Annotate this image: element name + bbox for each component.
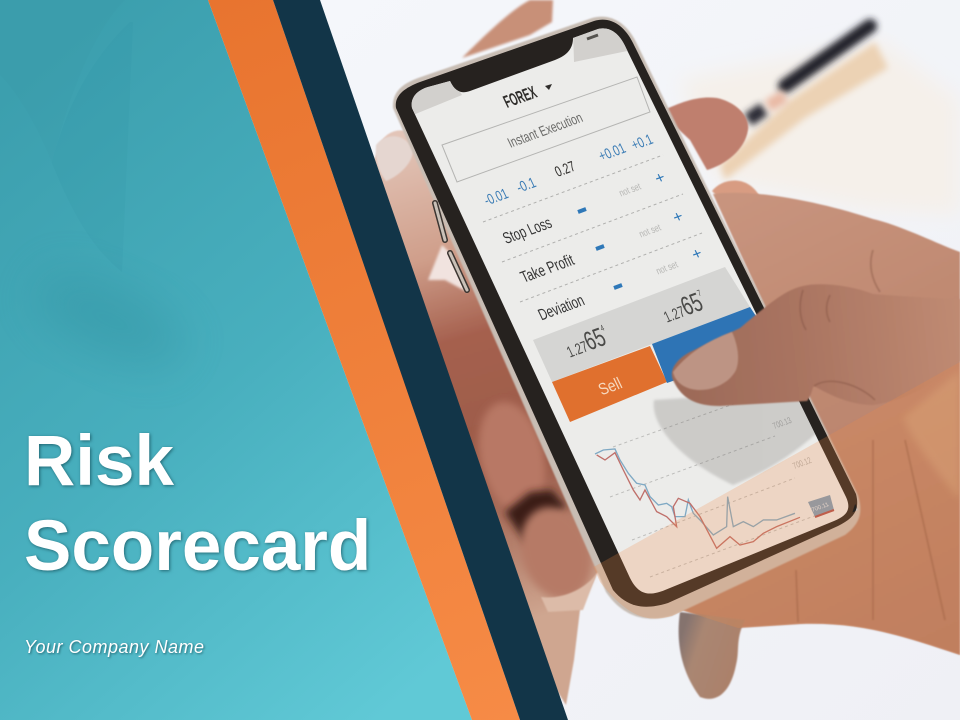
app: price panel: 1.2765 xyxy=(564,322,610,361)
orange diagonal stripe xyxy=(208,0,520,720)
app: take profit row: not set xyxy=(638,223,663,240)
photo background xyxy=(300,0,960,720)
app: price panel: 1.2765 xyxy=(661,287,707,326)
title: Risk xyxy=(24,422,174,501)
app: dashed row dividers xyxy=(483,155,702,302)
phone: side buttons xyxy=(435,203,467,290)
app: price chart xyxy=(595,391,834,577)
hand: lighter thenar fold xyxy=(903,370,960,500)
chart: red series xyxy=(597,453,800,548)
phone: status icons xyxy=(587,35,598,39)
thumb nail xyxy=(673,332,738,390)
app: stop loss row: not set xyxy=(618,182,643,199)
app: instant execution box: Instant Execution xyxy=(505,110,586,151)
thumb shadow on screen xyxy=(653,397,816,486)
phone: silver body xyxy=(393,17,860,619)
app: deviation row: not set xyxy=(655,260,680,277)
app: lot size controls xyxy=(481,131,656,209)
chart: axis labels: 700.12 xyxy=(791,455,813,471)
app: price panel: 4 xyxy=(598,323,606,333)
phone: black bezel xyxy=(396,20,857,607)
chart: dashed grid lines xyxy=(610,391,825,577)
app: lot size controls: 0.27 xyxy=(552,158,578,181)
app: sell button xyxy=(552,346,667,422)
chart: price tag xyxy=(808,495,834,517)
app: take profit row: + xyxy=(670,208,686,227)
app: sell button: Sell xyxy=(595,374,625,399)
chart: axis labels: 700.13 xyxy=(771,415,793,431)
app: stop loss row: Stop Loss xyxy=(500,214,555,248)
app: lot size controls: -0.1 xyxy=(514,175,539,196)
app header: FOREX: FOREX xyxy=(500,82,540,112)
hand: back fingers and right palm xyxy=(462,0,960,699)
chart: axis labels xyxy=(771,415,813,471)
title xyxy=(24,422,371,586)
app: price panel: 7 xyxy=(695,288,703,298)
app: deviation row xyxy=(535,245,705,324)
app: price panel xyxy=(533,267,750,382)
company name: Your Company Name xyxy=(24,637,204,657)
thumb knuckle creases xyxy=(800,290,875,400)
chart: price tag: 700.11 xyxy=(811,502,831,514)
navy diagonal stripe xyxy=(273,0,568,720)
app: lot size controls: +0.1 xyxy=(629,131,656,154)
app: lot size controls: +0.01 xyxy=(596,140,629,165)
app: stop loss row xyxy=(500,169,668,248)
app: buy button xyxy=(652,307,775,383)
app: lot size controls: -0.01 xyxy=(481,186,511,209)
app: deviation row: Deviation xyxy=(535,292,587,324)
orange translucent overlay xyxy=(594,362,960,655)
panel: teal diagonal xyxy=(0,0,472,720)
app: stop loss row: + xyxy=(652,169,668,188)
app: take profit row: Take Profit xyxy=(518,251,577,286)
phone: screen xyxy=(412,28,848,594)
hand: thumb pressing screen xyxy=(672,284,960,406)
hand: left thumb and fingers xyxy=(340,130,605,705)
title: Scorecard xyxy=(24,507,371,586)
app: take profit row xyxy=(518,208,686,286)
chart: blue series xyxy=(595,449,795,535)
smartphone xyxy=(393,17,870,620)
app: instant execution box xyxy=(442,77,650,182)
app header: FOREX xyxy=(500,82,552,112)
hand: lower finger xyxy=(679,612,745,699)
app: deviation row: + xyxy=(689,245,705,264)
